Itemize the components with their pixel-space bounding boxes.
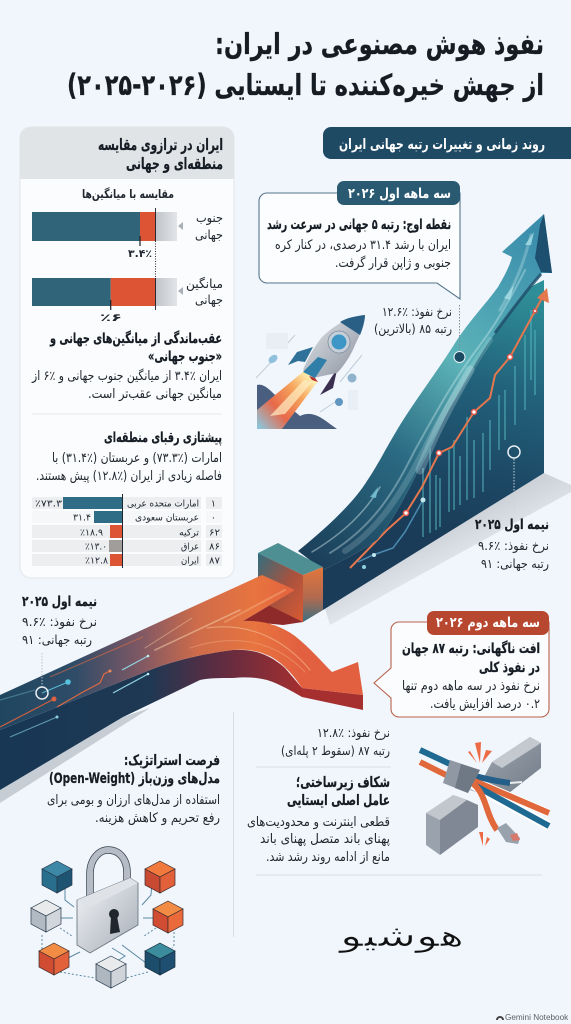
rising arrow: teal growth path (298, 214, 552, 570)
callout: second quarter 2026: در نفوذ کلی (479, 660, 540, 676)
right block (470, 737, 541, 800)
stats: right first half 2025 (475, 517, 549, 572)
arrow: drop shadow under rising chart (323, 473, 571, 625)
panel heading (98, 136, 223, 173)
text block: infrastructure gap: شکاف زیرساختی؛ (296, 775, 390, 791)
stats: right first half 2025: نرخ نفوذ: ٪۹.۶ (478, 538, 549, 554)
ranking table chart: ایران (181, 556, 199, 566)
circuit traces on band (0, 637, 148, 737)
stats: left first half 2025: نرخ نفوذ: ٪۹.۶ (22, 614, 97, 630)
bar: global south (32, 210, 223, 260)
stats: right first half 2025: رتبه جهانی: ۹۱ (481, 556, 549, 572)
text block: infrastructure gap: عامل اصلی ایستایی (287, 793, 390, 809)
callout: second quarter 2026: ۰.۲ درصد افزایش یافت. (430, 697, 540, 712)
text block: infrastructure gap: قطعی اینترنت و محدودیت‌های (247, 815, 390, 830)
bar: world average: میانگین (186, 276, 223, 292)
left block (440, 795, 478, 855)
comparison subheading: مقایسه با میانگین‌ها (82, 187, 174, 201)
ranking table chart: ٪۱۸.۹ (80, 528, 103, 538)
stats: left first half 2025 (22, 594, 97, 648)
footer: Gemini Notebook credit: Gemini Notebook (505, 1013, 569, 1022)
bar: global south: جهانی (195, 227, 223, 243)
icon: cut cable (420, 737, 549, 855)
junction box (258, 543, 323, 622)
ranking table chart: ترکیه (179, 528, 199, 538)
streaks on falling arrow (145, 590, 310, 672)
callout: first quarter 2026: ایران با رشد ۳۱.۴ درصدی، در کنار کره (275, 238, 451, 253)
callout: first quarter 2026 (259, 181, 460, 299)
stats: second quarter 2026 (281, 725, 390, 759)
ranking table chart: ۸۶ (209, 542, 220, 552)
stats: first quarter 2026 (374, 304, 460, 351)
text block: regional rivals: پیشتازی رقبای منطقه‌ای (104, 430, 222, 446)
cube: teal (145, 943, 175, 975)
icon: rocket (256, 315, 365, 429)
bar: world average: جهانی (195, 292, 223, 308)
text block: infrastructure gap (247, 775, 390, 865)
callout: first quarter 2026: نقطه اوج: رتبه ۵ جهانی در سرعت رشد (267, 217, 451, 233)
logo: هوشیو (337, 919, 464, 954)
cube: grey (31, 900, 61, 932)
text block: strategic opportunity (47, 753, 220, 826)
ranking table chart: ٪۱۳.۰ (85, 542, 107, 552)
cube: orange-red (39, 943, 69, 975)
text block: lagging behind averages: «جنوب جهانی» (148, 349, 222, 365)
callout: first quarter 2026: جنوبی و ژاپن قرار گرفت. (335, 255, 451, 271)
clamp (443, 760, 480, 793)
text block: strategic opportunity: فرصت استراتژیک: (124, 753, 220, 769)
vertical data bars (423, 310, 535, 537)
bar: world average: ٪۶ (100, 312, 122, 324)
bar: world average (32, 276, 223, 324)
text block: lagging behind averages: ایران ٪۳.۴ از میانگین جنوب جهانی و ٪۶ از (31, 368, 222, 384)
cube: grey lower (96, 956, 126, 988)
ranking table chart: ۶۲ (209, 528, 220, 538)
ranking table chart: ۸۷ (209, 556, 220, 566)
text block: regional rivals: فاصله زیادی از ایران (٪۱۲.۸) پیش هستند. (36, 469, 222, 484)
callout: second quarter 2026: نرخ نفوذ در سه ماهه دوم تنها (402, 679, 540, 694)
callout: second quarter 2026: سه ماهه دوم ۲۰۲۶ (436, 615, 540, 631)
stats: first quarter 2026: رتبه ۸۵ (بالاترین) (374, 321, 452, 337)
callout: second quarter 2026: افت ناگهانی: رتبه ۸۷ جهان (402, 640, 540, 657)
stats: left first half 2025: نیمه اول ۲۰۲۵ (22, 594, 97, 610)
ranking table chart: عراق (181, 542, 199, 552)
stats: first quarter 2026: نرخ نفوذ: ٪۱۲.۶ (382, 304, 452, 320)
callout: second quarter 2026 (374, 611, 549, 717)
ranking table chart: ٪۱۲.۸ (85, 556, 108, 566)
bar: global south: جنوب (196, 210, 223, 226)
falling arrow: orange decline path (0, 575, 363, 790)
marker: first half 2025 (508, 446, 520, 458)
stats: second quarter 2026: رتبه ۸۷ (سقوط ۲ پله‌ای) (281, 743, 390, 759)
blue line (358, 500, 423, 562)
cube: orange (153, 901, 183, 933)
text block: lagging behind averages (31, 330, 222, 402)
orange trend line with nodes (350, 296, 543, 568)
stats: right first half 2025: نیمه اول ۲۰۲۵ (475, 517, 549, 533)
ranking table chart: ۳۱.۴ (73, 512, 91, 524)
title (67, 27, 544, 102)
ranking table chart: عربستان سعودی (135, 512, 199, 524)
text block: infrastructure gap: مانع از ادامه روند رشد شد. (266, 850, 390, 865)
ranking table chart (32, 494, 222, 568)
stats: second quarter 2026: نرخ نفوذ: ٪۱۲.۸ (317, 725, 390, 741)
stats: left first half 2025: رتبه جهانی: ۹۱ (22, 632, 92, 648)
text block: strategic opportunity: مدل‌های وزن‌باز (Open-Weight) (49, 771, 220, 787)
marker: first quarter 2026 (454, 352, 465, 362)
text block: strategic opportunity: رفع تحریم و کاهش هزینه. (95, 811, 220, 826)
bar: global south: ۳.۴٪ (128, 248, 152, 260)
text block: regional rivals (36, 430, 222, 484)
ranking table chart: امارات متحده عربی (127, 498, 199, 510)
panel heading: منطقه‌ای و جهانی (126, 155, 223, 173)
ranking table chart: ۱ (211, 498, 216, 510)
timeline header (323, 127, 571, 159)
text block: lagging behind averages: میانگین جهانی عقب‌تر است. (88, 386, 222, 402)
text block: lagging behind averages: عقب‌ماندگی از میانگین‌های جهانی و (49, 330, 222, 347)
icon: padlock with open-weight model cubes (31, 850, 183, 988)
stub under junction (243, 590, 303, 625)
text block: regional rivals: امارات (٪۷۳.۳) و عربستان (٪۳۱.۴) با (52, 451, 222, 466)
text block: infrastructure gap: پهنای باند متصل پهنای باند (260, 832, 390, 847)
ranking table chart: ٪۷۳.۳ (35, 498, 62, 510)
falling arrow shadow (0, 708, 150, 803)
cube: red-orange (145, 861, 175, 893)
ranking table chart: ۰ (211, 512, 216, 524)
text block: strategic opportunity: استفاده از مدل‌های ارزان و بومی برای (47, 793, 220, 808)
panel heading: ایران در ترازوی مقایسه (98, 136, 223, 154)
chart panel: dark face under rising arrow (323, 280, 549, 610)
marker: left first half 2025 (36, 653, 48, 699)
panel: regional and global comparison (20, 127, 234, 578)
callout: first quarter 2026: سه ماهه اول ۲۰۲۶ (348, 186, 451, 202)
light streaks on arrow (312, 235, 531, 553)
cube: blue (42, 861, 72, 893)
